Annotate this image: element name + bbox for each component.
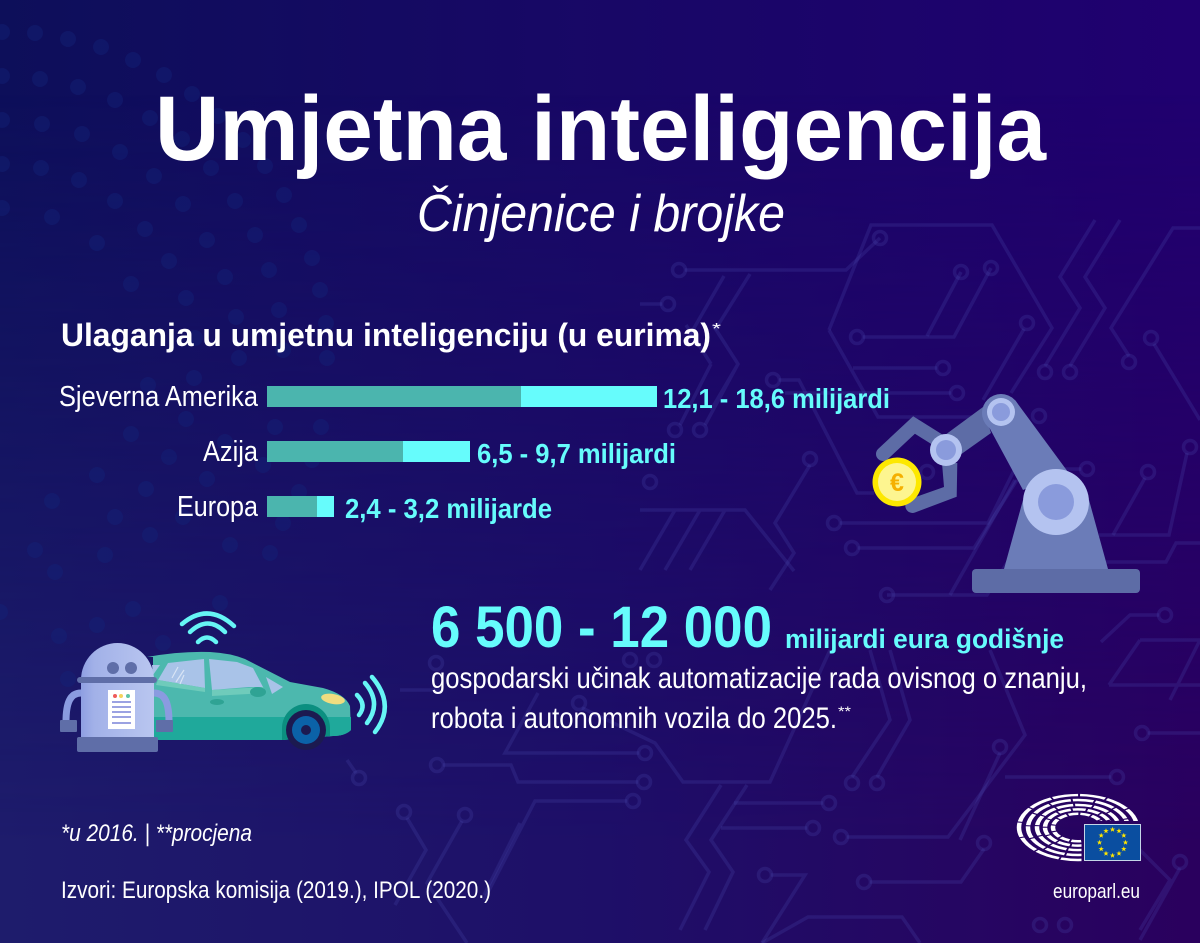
big number: economic impact (431, 595, 1064, 660)
row: Sjeverna Amerika: 12,1 - 18,6 milijardi (663, 383, 890, 414)
text block: impact description: gospodarski učinak automatizacije rada ovisnog o znanju, (431, 662, 1087, 695)
row: Azija: Azija (203, 436, 259, 468)
icon: robot arm holding euro coin (872, 394, 1140, 593)
row: Europa: Europa (177, 491, 259, 523)
icon: autonomous car with robot (60, 613, 385, 752)
text block: impact description: robota i autonomnih vozila do 2025. (431, 702, 837, 735)
icon: euro coin: € (890, 469, 904, 497)
row: Sjeverna Amerika (59, 381, 890, 414)
hemicycle (1019, 795, 1137, 860)
icon: euro coin (872, 458, 922, 506)
EU flag (1084, 824, 1140, 860)
heading: investments: Ulaganja u umjetnu inteligenciju (u eurima) (61, 317, 711, 353)
big number: economic impact: 6 500 - 12 000 (431, 595, 772, 660)
icon: signal waves in front of car (357, 677, 385, 732)
row: Europa: 2,4 - 3,2 milijarde (345, 493, 552, 524)
row: Sjeverna Amerika: Sjeverna Amerika (59, 381, 259, 413)
title: Umjetna inteligencija (155, 78, 1047, 180)
subtitle: Činjenice i brojke (417, 185, 785, 243)
heading: investments: * (712, 321, 721, 338)
row: Azija (203, 436, 676, 469)
website: europarl.eu (1053, 881, 1140, 903)
bar chart: investments by region (59, 381, 890, 524)
footnotes: *u 2016. | **procjena (61, 820, 252, 847)
sources: Izvori: Europska komisija (2019.), IPOL (2020.) (61, 877, 491, 904)
text block: impact description: ** (838, 703, 852, 719)
icon: wifi signal above car (182, 613, 234, 642)
background dot pattern (0, 24, 335, 687)
logo: European Parliament (1019, 795, 1140, 903)
car (147, 652, 351, 750)
big number: economic impact: milijardi eura godišnje (785, 624, 1064, 654)
row: Europa (177, 491, 552, 524)
text block: impact description (431, 662, 1087, 735)
background circuit pattern (347, 220, 1200, 943)
row: Azija: 6,5 - 9,7 milijardi (477, 438, 676, 469)
robot (60, 643, 173, 752)
